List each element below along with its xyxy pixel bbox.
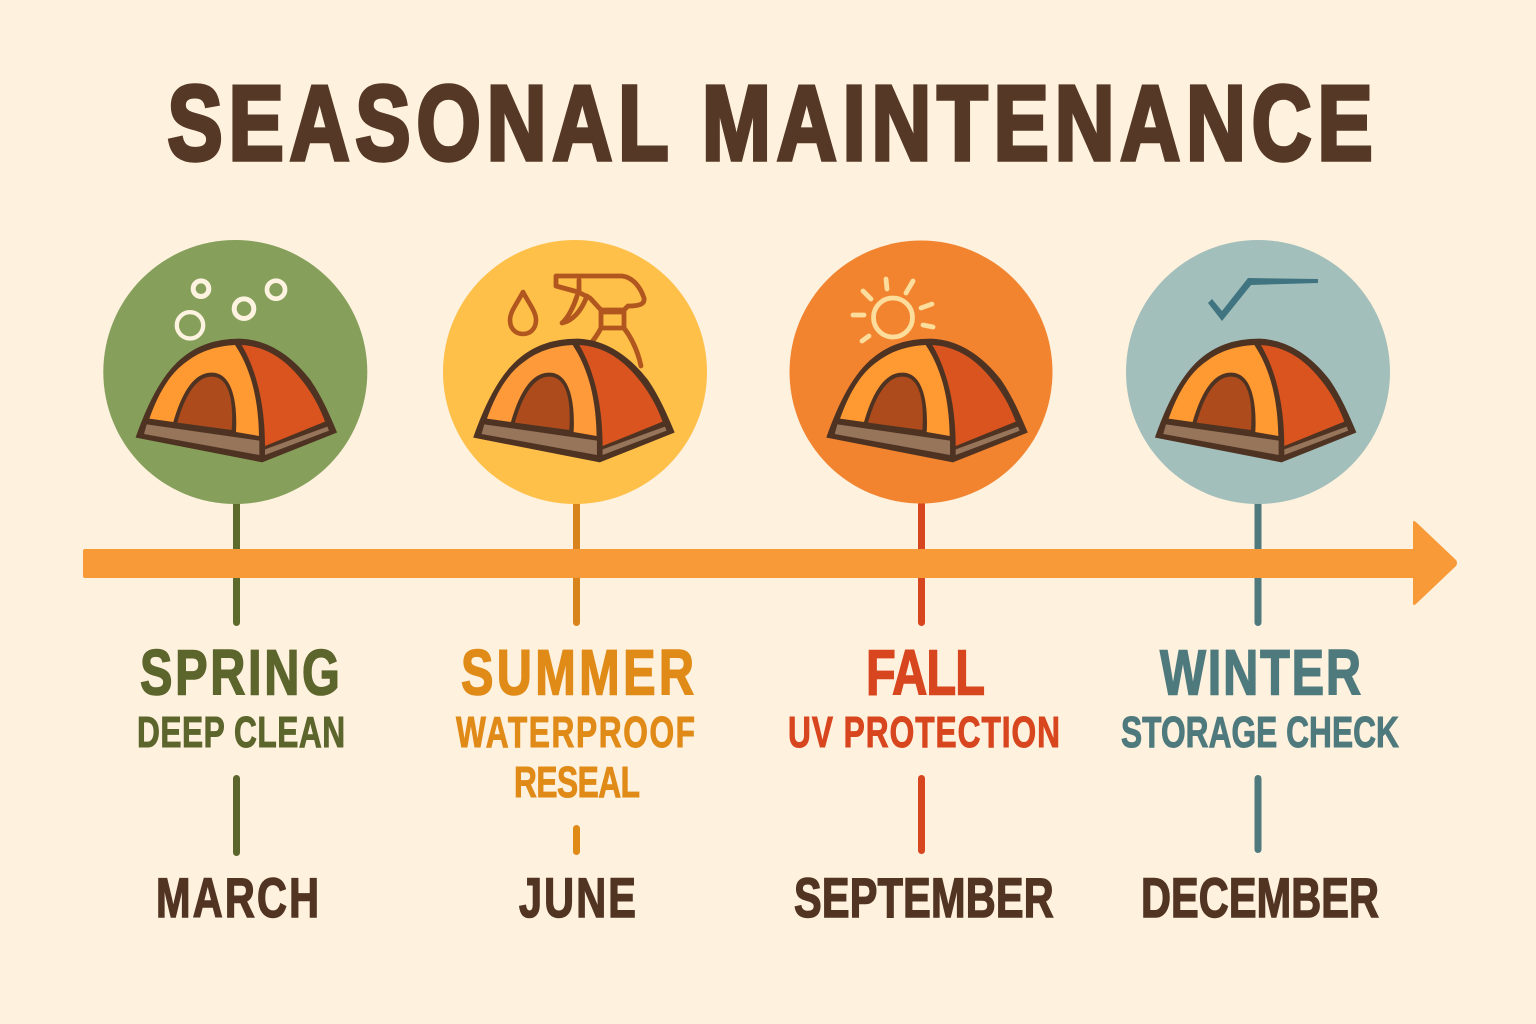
fall labels: SEPTEMBER xyxy=(794,867,1054,930)
panel: summer xyxy=(443,240,707,504)
summer circle xyxy=(443,240,707,504)
fall labels xyxy=(788,638,1060,930)
spring labels: DEEP CLEAN xyxy=(137,708,345,757)
spring labels: MARCH xyxy=(156,867,319,930)
spring labels xyxy=(137,638,345,930)
icon: bubbles xyxy=(177,281,285,338)
winter circle xyxy=(1126,240,1390,504)
winter labels xyxy=(1121,638,1399,930)
panel: winter xyxy=(1126,240,1390,504)
summer labels: RESEAL xyxy=(514,758,640,807)
winter labels: DECEMBER xyxy=(1141,867,1379,930)
icon: tent xyxy=(474,339,674,462)
fall labels: FALL xyxy=(866,638,985,709)
timeline arrow xyxy=(83,521,1457,605)
icon: water drop xyxy=(510,292,536,334)
icon: tent xyxy=(827,339,1027,462)
icon: tent xyxy=(136,339,337,462)
summer labels: JUNE xyxy=(519,867,636,930)
winter labels: WINTER xyxy=(1160,638,1361,709)
spring labels: SPRING xyxy=(140,638,340,709)
fall labels: UV PROTECTION xyxy=(788,708,1060,757)
summer labels: SUMMER xyxy=(461,638,694,709)
spring circle xyxy=(103,240,367,504)
summer labels: WATERPROOF xyxy=(456,708,695,757)
panel: fall xyxy=(790,240,1052,504)
title: SEASONAL MAINTENANCE xyxy=(168,65,1373,183)
icon: tent xyxy=(1155,339,1356,462)
fall circle xyxy=(790,240,1052,504)
summer labels xyxy=(456,638,695,930)
icon: spray bottle xyxy=(556,276,644,366)
icon: sun xyxy=(853,279,933,341)
panel: spring xyxy=(103,240,367,504)
winter labels: STORAGE CHECK xyxy=(1121,708,1399,757)
icon: check mark xyxy=(1208,278,1318,321)
stems: upper connectors from circles to timeline xyxy=(233,500,1262,626)
